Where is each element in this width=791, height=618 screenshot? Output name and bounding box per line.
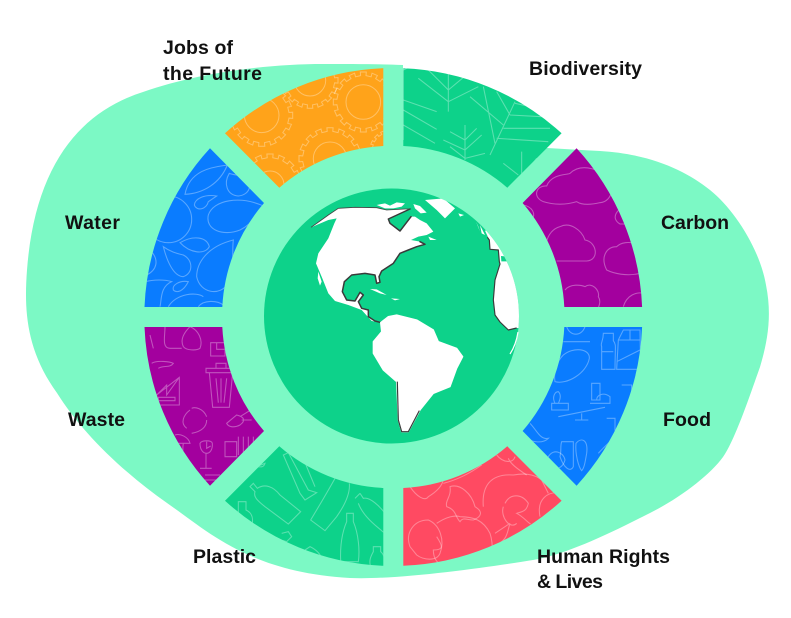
europe and africa <box>485 230 519 330</box>
pattern: waste items <box>150 327 253 480</box>
label: human rights and lives: & Lives <box>537 571 603 593</box>
arctic islands and iceland <box>413 204 485 240</box>
pattern: leaves <box>403 65 550 183</box>
segment: plastic <box>225 446 385 567</box>
pattern: bottles <box>238 453 385 567</box>
label: carbon: Carbon <box>661 212 729 234</box>
europe, africa and greenland group <box>413 198 524 330</box>
coastline <box>487 237 517 330</box>
label: jobs of the future: the Future <box>163 63 262 85</box>
label: plastic: Plastic <box>193 546 256 568</box>
northern coastline <box>311 207 410 227</box>
pattern: clouds <box>523 168 643 310</box>
pattern: food items <box>525 327 641 471</box>
globe <box>264 188 524 444</box>
south america <box>373 315 463 432</box>
label: water: Water <box>65 212 120 234</box>
segment: food <box>523 327 642 486</box>
label: food: Food <box>663 409 711 431</box>
pattern: faces <box>409 455 563 567</box>
globe edge sliver <box>510 332 518 354</box>
south america coastline <box>397 382 419 432</box>
mint background blob <box>26 64 769 578</box>
pattern: gears <box>232 72 384 184</box>
segment: carbon <box>523 148 643 310</box>
continents <box>311 198 524 432</box>
south america group <box>373 315 463 432</box>
label: waste: Waste <box>68 409 125 431</box>
eastern coastline <box>342 209 425 322</box>
baja, caribbean and arctic islands <box>318 202 405 300</box>
segment: waste <box>144 327 264 486</box>
pattern: water drops <box>140 165 265 307</box>
label: jobs of the future: Jobs of <box>163 37 234 59</box>
north america group <box>311 202 433 322</box>
segment: water <box>140 148 265 307</box>
segment: human rights and lives <box>403 446 563 567</box>
label: biodiversity: Biodiversity <box>529 58 642 80</box>
north america <box>311 207 433 322</box>
label: human rights and lives: Human Rights <box>537 546 670 568</box>
segment: biodiversity <box>403 65 562 188</box>
segment: jobs of the future <box>225 68 384 188</box>
greenland <box>425 198 455 218</box>
